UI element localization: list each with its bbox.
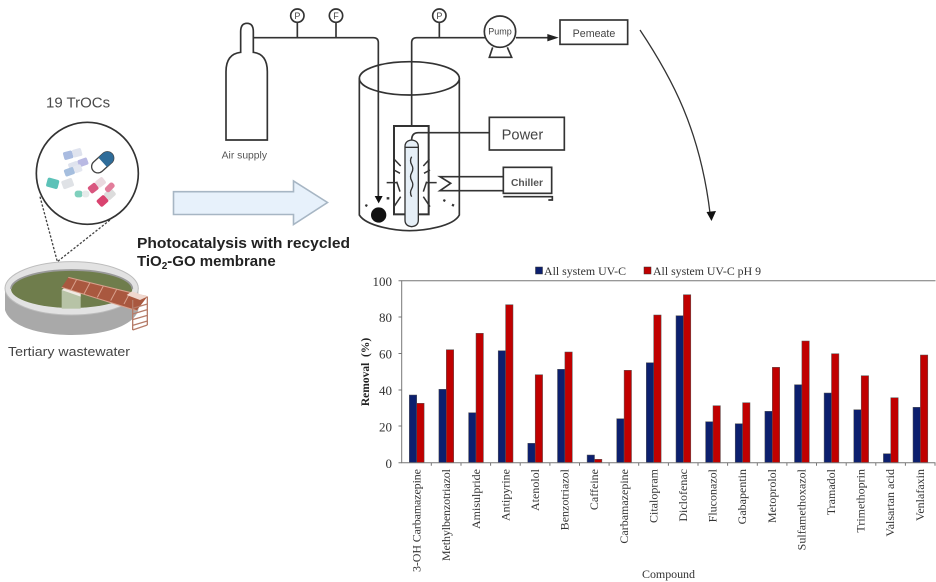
compound labels: Venlafaxin [913, 469, 927, 521]
box: power [412, 117, 564, 150]
heading: photocatalysis: TiO [137, 253, 162, 270]
icon: clarifier tank [5, 262, 147, 335]
heading: photocatalysis [137, 235, 350, 272]
blue bars [409, 316, 920, 463]
compound labels: Tramadol [824, 468, 838, 515]
permeate pipe with gauge [412, 9, 485, 126]
icon: pump [484, 16, 516, 57]
label: 19 TrOCs: 19 TrOCs [46, 94, 110, 111]
y axis labels: 20 [379, 420, 392, 434]
red bars [417, 295, 928, 463]
permeate pipe with gauge: P [436, 11, 442, 21]
compound labels: Caffeine [587, 469, 601, 510]
compound labels: Fluconazol [706, 468, 720, 522]
box: permeate: Pemeate [573, 28, 615, 40]
y axis labels [372, 274, 392, 471]
compound labels: Sulfamethoxazol [794, 468, 808, 550]
compound labels: Gabapentin [735, 469, 749, 524]
compound labels: Antipyrine [498, 469, 512, 521]
air pipe with gauges: P [294, 11, 300, 21]
compound labels: Trimethoprin [854, 469, 868, 533]
compound labels: Amisulpride [469, 469, 483, 529]
panel: wastewater source [5, 94, 147, 359]
chart legend [536, 264, 761, 278]
icon: membrane module and UV lamp [387, 126, 437, 227]
compound labels: Methylbenzotriazol [439, 468, 453, 561]
bar chart: removal by compound [360, 264, 936, 581]
compound labels: Metoprolol [765, 468, 779, 523]
y axis labels: 60 [379, 346, 392, 362]
box: chiller [440, 167, 552, 200]
icon: magnified pills circle [36, 122, 138, 224]
compound labels: Atenolol [528, 468, 542, 511]
label: tertiary wastewater: Tertiary wastewater [8, 345, 130, 359]
icon: air cylinder [226, 23, 267, 140]
heading: photocatalysis: -GO membrane [167, 253, 276, 270]
chart legend: All system UV-C [544, 264, 626, 278]
compound labels: Citalopram [646, 468, 660, 523]
y axis labels: 0 [386, 456, 392, 471]
compound labels: Valsartan acid [883, 469, 897, 537]
box: permeate [560, 20, 628, 44]
x axis title: Compound [642, 567, 695, 581]
compound labels: 3-OH Carbamazepine [410, 469, 424, 572]
icon: reactor tank [359, 62, 459, 231]
compound labels [410, 468, 927, 572]
arrow: permeate to results [640, 30, 716, 221]
compound labels: Diclofenac [676, 469, 690, 522]
compound labels: Benzotriazol [558, 468, 572, 530]
icon: air diffuser [371, 196, 386, 223]
chart legend: All system UV-C pH 9 [653, 264, 761, 278]
air pipe with gauges [253, 9, 378, 197]
box: chiller: Chiller [511, 178, 543, 189]
magnifier dashed lines [40, 197, 110, 262]
heading: photocatalysis: 2 [162, 261, 168, 272]
panel: reactor schematic [222, 9, 628, 231]
y axis labels: 40 [379, 383, 392, 398]
arrow: pump to permeate [516, 34, 559, 41]
icon: pump: Pump [488, 27, 512, 37]
label: air supply: Air supply [222, 150, 268, 161]
box: power: Power [502, 127, 543, 143]
arrow: process direction [174, 181, 328, 224]
air pipe with gauges: F [333, 11, 339, 21]
chart axes [398, 281, 936, 466]
y axis labels: 80 [379, 310, 392, 325]
y axis title: Removal (%) [360, 338, 372, 406]
y axis labels: 100 [372, 274, 392, 289]
heading: photocatalysis: Photocatalysis with recycled [137, 235, 350, 252]
compound labels: Carbamazepine [617, 469, 631, 544]
